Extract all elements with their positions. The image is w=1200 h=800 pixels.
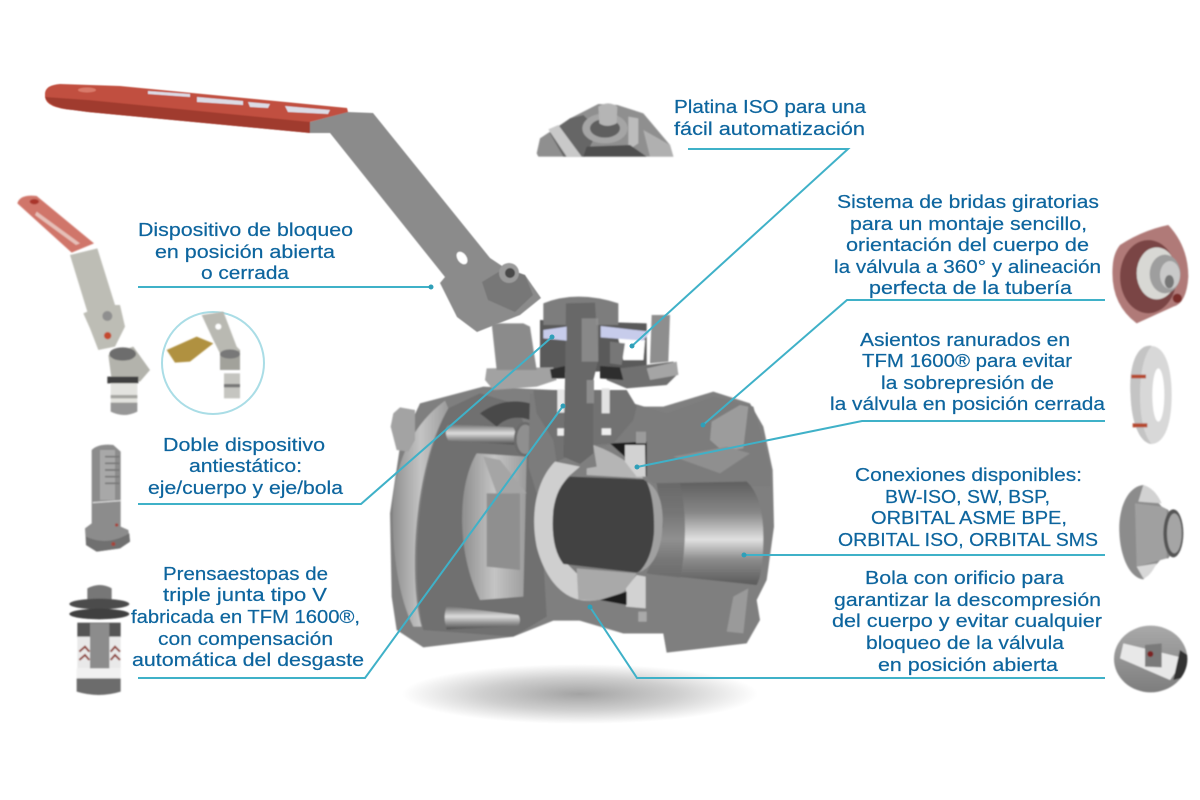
text: platina ISO: Platina ISO para una bbox=[674, 96, 867, 117]
text: bridas giratorias: la válvula a 360° y alineación bbox=[834, 256, 1101, 277]
text: bola con orificio bbox=[832, 567, 1102, 675]
right stud bbox=[650, 315, 670, 363]
right bolt head bbox=[710, 405, 748, 452]
text: conexiones: Conexiones disponibles: bbox=[855, 464, 1082, 485]
lower right body bbox=[553, 573, 757, 652]
text: dispositivo de bloqueo bbox=[138, 219, 353, 283]
dark inner arc bbox=[480, 401, 530, 427]
left flange ring bbox=[393, 401, 448, 627]
white gap at rear bbox=[618, 338, 645, 360]
lilac antistatic plates bbox=[543, 326, 650, 341]
text: prensaestopas: automática del desgaste bbox=[132, 649, 364, 670]
text: asientos ranurados: Asientos ranurados en bbox=[860, 329, 1070, 350]
main valve with handle bbox=[45, 84, 774, 653]
icon: padlock detail circle bbox=[162, 312, 264, 414]
text: dispositivo de bloqueo: en posición abierta bbox=[155, 241, 336, 262]
ISO mounting platform bbox=[485, 367, 557, 390]
text: dispositivo de bloqueo: o cerrada bbox=[201, 262, 290, 283]
text: conexiones bbox=[838, 464, 1098, 550]
text: bola con orificio: en posición abierta bbox=[878, 654, 1059, 675]
body silhouette bbox=[390, 387, 774, 653]
icon: vented ball bbox=[1114, 626, 1190, 692]
ball bore bbox=[553, 477, 661, 573]
text: dispositivo de bloqueo: Dispositivo de bloqueo bbox=[138, 219, 353, 240]
text: bridas giratorias bbox=[834, 191, 1101, 298]
text: bola con orificio: del cuerpo y evitar cualquier bbox=[832, 610, 1102, 631]
text: asientos ranurados: TFM 1600® para evitar bbox=[862, 350, 1072, 371]
text: doble dispositivo antiestático: antiestático: bbox=[189, 455, 302, 476]
icon: ISO mounting plate thumbnail bbox=[537, 103, 673, 157]
text: asientos ranurados: la válvula en posición cerrada bbox=[830, 393, 1106, 414]
leader line: bloqueo bbox=[138, 284, 434, 290]
text: conexiones: BW-ISO, SW, BSP, bbox=[885, 486, 1050, 507]
infographic canvas bbox=[16, 83, 1190, 722]
icon: end connector bbox=[1119, 485, 1183, 579]
bonnet neck section bbox=[533, 390, 637, 462]
upper tie rod bbox=[446, 424, 516, 445]
text: doble dispositivo antiestático bbox=[148, 434, 344, 498]
leader line: conexiones bbox=[742, 552, 1105, 558]
text: prensaestopas: triple junta tipo V bbox=[163, 584, 328, 605]
text: prensaestopas bbox=[131, 563, 364, 670]
main handle: red grip and steel lever bbox=[45, 84, 541, 332]
upper seat bbox=[625, 445, 646, 477]
text: asientos ranurados bbox=[830, 329, 1106, 414]
text: asientos ranurados: la sobrepresión de bbox=[881, 372, 1054, 393]
text: platina ISO: fácil automatización bbox=[674, 118, 865, 139]
neck head bbox=[543, 297, 618, 325]
valve body, drawn in zoomed coordinates bbox=[390, 297, 774, 653]
text: bridas giratorias: Sistema de bridas giratorias bbox=[837, 191, 1099, 212]
left flange inner face bbox=[417, 393, 547, 637]
ball crescent bbox=[534, 462, 632, 601]
left bolt head bbox=[391, 407, 415, 452]
gland packing white bars bbox=[557, 388, 611, 436]
leader line: prensaestopas bbox=[138, 404, 566, 678]
text: prensaestopas: fabricada en TFM 1600®, bbox=[131, 606, 360, 627]
outlet bore bbox=[647, 482, 763, 585]
icon: stem packing assembly bbox=[69, 585, 129, 695]
leader line: antiestático bbox=[138, 334, 554, 504]
text: conexiones: ORBITAL ASME BPE, bbox=[871, 507, 1067, 528]
interior behind neck bbox=[540, 320, 647, 373]
icon: small handle with stem bbox=[17, 196, 150, 415]
left inner cylinder bbox=[462, 453, 527, 600]
left pillar bbox=[492, 323, 537, 370]
stem collar detail bbox=[550, 366, 565, 378]
text: bridas giratorias: perfecta de la tubería bbox=[869, 277, 1073, 298]
text: bola con orificio: bloqueo de la válvula bbox=[866, 632, 1065, 653]
leader line: bola bbox=[588, 604, 1105, 678]
icon: rotating flange bbox=[1112, 225, 1188, 323]
text: platina ISO bbox=[674, 96, 867, 139]
icon: grooved seat ring bbox=[1130, 346, 1172, 444]
text: bola con orificio: Bola con orificio para bbox=[865, 567, 1065, 588]
upper body groove bbox=[673, 447, 750, 473]
centre body section bbox=[528, 393, 770, 493]
text: bola con orificio: garantizar la descompresión bbox=[834, 589, 1101, 610]
lower right bolt bbox=[727, 588, 748, 633]
ball upper section bbox=[587, 445, 643, 478]
text: prensaestopas: Prensaestopas de bbox=[163, 563, 328, 584]
lower seat bbox=[626, 575, 646, 608]
text: conexiones: ORBITAL ISO, ORBITAL SMS bbox=[838, 529, 1098, 550]
leader line: asientos bbox=[634, 421, 1105, 470]
text: bridas giratorias: orientación del cuerpo de bbox=[846, 234, 1089, 255]
lower tie rod bbox=[445, 606, 520, 629]
leader line: bridas bbox=[700, 300, 1105, 428]
text: bridas giratorias: para un montaje sencillo, bbox=[850, 213, 1087, 234]
text: doble dispositivo antiestático: eje/cuerpo y eje/bola bbox=[148, 477, 344, 498]
floor shadow under valve bbox=[402, 664, 758, 724]
leader line: platina ISO bbox=[630, 149, 848, 348]
icon: antistatic bolt bbox=[85, 445, 130, 552]
stud eye bbox=[515, 423, 535, 455]
stem bbox=[563, 303, 598, 464]
text: doble dispositivo antiestático: Doble dispositivo bbox=[163, 434, 325, 455]
text: prensaestopas: con compensación bbox=[158, 628, 333, 649]
